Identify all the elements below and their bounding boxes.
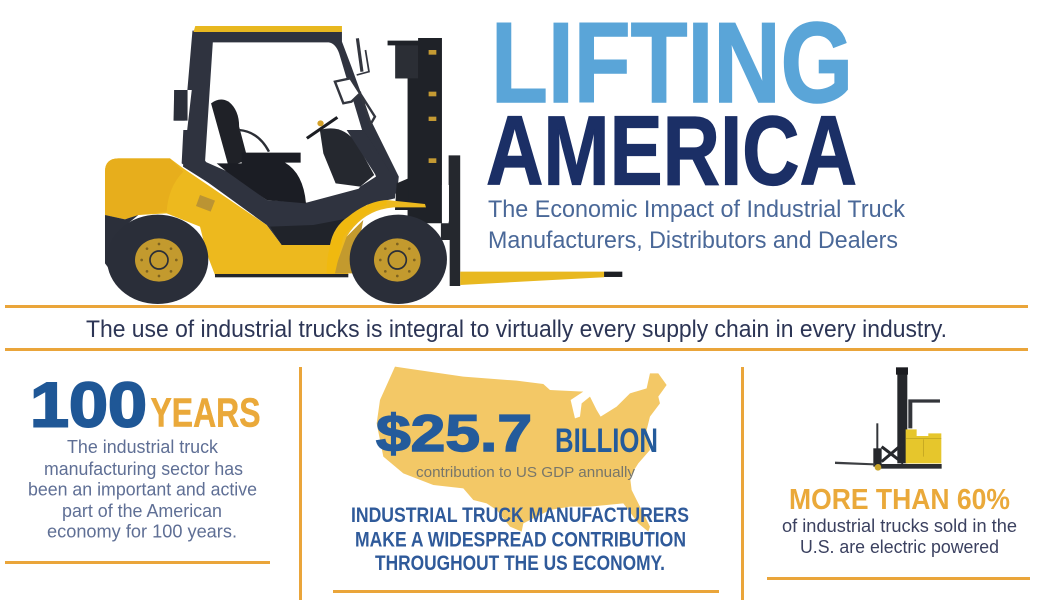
- illustration: yellow forklift: [105, 26, 622, 304]
- title word: LIFTING: LIFTING: [491, 0, 853, 127]
- statement text: MAKE A WIDESPREAD CONTRIBUTION: [355, 528, 686, 552]
- map of the United States: [377, 367, 667, 532]
- stat: more than 60%: MORE THAN 60%: [789, 484, 1010, 516]
- panel: GDP contribution: [333, 367, 719, 593]
- forklift lower: body and wheels: [105, 130, 447, 304]
- description text: [28, 436, 257, 542]
- description text: [782, 515, 1017, 557]
- rear wheel: [107, 215, 208, 304]
- title word: AMERICA: AMERICA: [486, 96, 857, 206]
- statement text: INDUSTRIAL TRUCK MANUFACTURERS: [351, 504, 689, 527]
- tagline: The use of industrial trucks is integral to virtually every supply chain in every industry.: [86, 316, 947, 343]
- subtitle: Manufacturers, Distributors and Dealers: [488, 227, 898, 254]
- panel: 100 years: [5, 370, 270, 564]
- description text: economy for 100 years.: [47, 520, 237, 542]
- stat: YEARS: YEARS: [150, 390, 260, 436]
- title: [486, 0, 857, 206]
- stat: BILLION: BILLION: [555, 422, 658, 460]
- description text: The industrial truck: [67, 436, 219, 457]
- description text: of industrial trucks sold in the: [782, 515, 1017, 536]
- description text: been an important and active: [28, 478, 257, 500]
- panel: electric powered: [767, 367, 1030, 580]
- front wheel: [350, 215, 447, 304]
- description text: part of the American: [62, 500, 222, 521]
- subtitle: The Economic Impact of Industrial Truck: [488, 196, 906, 223]
- stat: 100: 100: [30, 370, 147, 440]
- subtitle: [488, 196, 906, 254]
- forklift upper: mast, fork and cab: [174, 26, 622, 286]
- GDP caption: contribution to US GDP annually: [416, 464, 635, 481]
- statement text: [351, 504, 689, 575]
- statement text: THROUGHOUT THE US ECONOMY.: [375, 552, 665, 575]
- description text: U.S. are electric powered: [800, 536, 999, 557]
- description text: manufacturing sector has: [44, 458, 243, 479]
- stat: $25.7: $25.7: [376, 405, 532, 463]
- icon: electric reach truck: [835, 367, 942, 471]
